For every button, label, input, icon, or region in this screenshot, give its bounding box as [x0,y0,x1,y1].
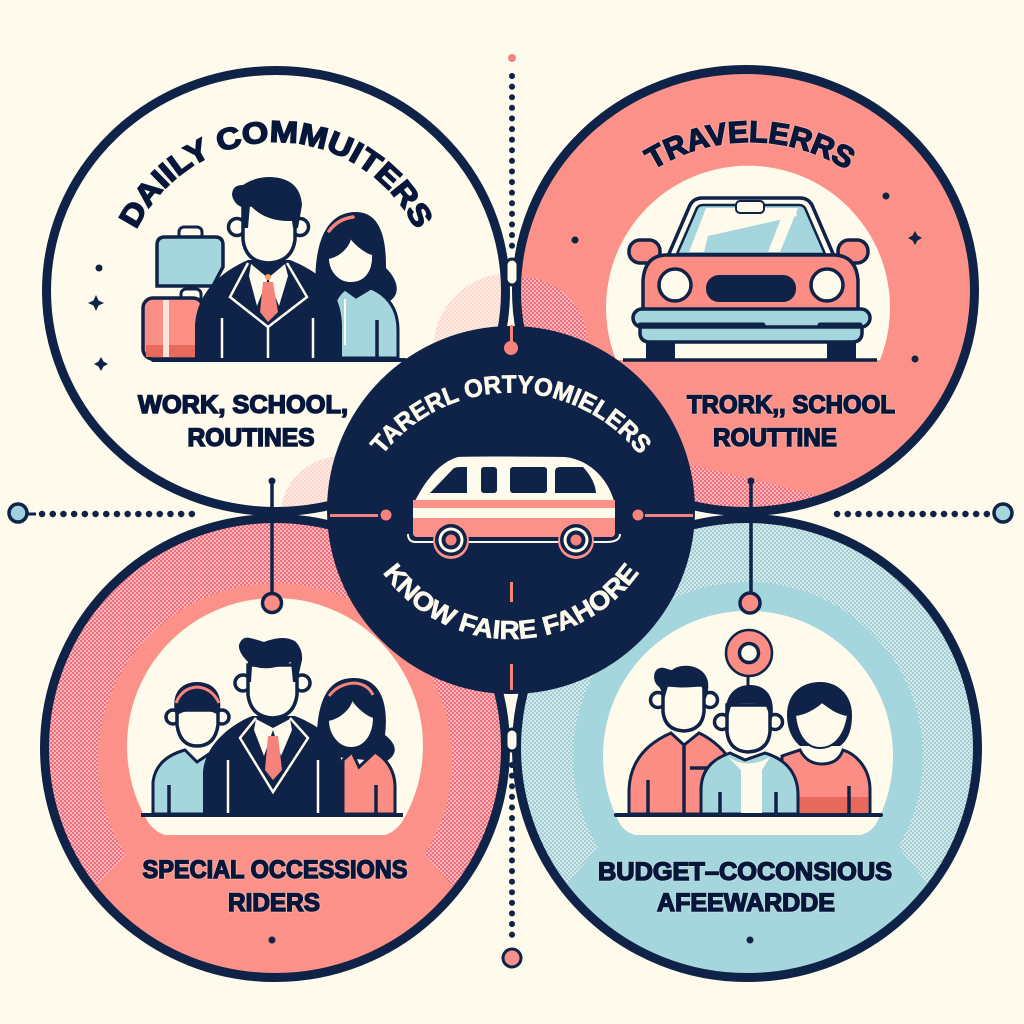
panel: budget-conscious [516,518,978,990]
text: work, school, routines: ROUTINES [188,424,314,452]
headlights [659,269,843,301]
icon: location pin [726,630,772,690]
windshield [668,198,834,256]
panel: special occasions riders [44,518,506,990]
text: work, school, routines [138,391,348,452]
connector: left horizontal dotted line [9,504,196,522]
car body [643,255,858,310]
text: budget-coconsious afeewardde: BUDGET–COCONSIOUS [598,858,892,886]
text: special occessions riders [142,856,408,917]
text: trork, school routtine [687,391,895,452]
figure: left man [629,666,727,814]
bus stripes [413,500,615,537]
text: special occessions riders: SPECIAL OCCESSIONS [142,856,408,884]
figure: woman [317,678,395,814]
mirrors [629,240,868,263]
text: trork, school routtine: TRORK,, SCHOOL [687,391,895,419]
bus underline [408,534,620,542]
grille [706,275,796,302]
dot [746,936,754,944]
bus wheels [433,523,594,559]
figure: right woman [782,682,870,814]
text: budget-coconsious afeewardde: AFEEWARDDE [657,889,835,917]
baseline [153,358,405,362]
baseline [141,813,403,817]
dot [268,936,276,944]
bumper [633,309,870,342]
decorative marks [572,192,922,362]
bus body [413,456,615,537]
connector pill: top [506,259,518,285]
text: budget-coconsious afeewardde [598,858,892,917]
connector: right horizontal dotted line [837,504,1012,522]
text: trork, school routtine: ROUTTINE [713,424,837,452]
icon: red suitcase [143,289,203,359]
panel: daily commuters [42,66,510,515]
heading: travelers: TRAVELERRS [641,120,856,168]
connector: right drop line [740,478,760,613]
baseline [616,813,881,817]
connector: left drop line [262,478,282,612]
figure: man in suit [203,638,343,814]
icon: minibus [408,456,620,559]
figure: boy [153,682,229,814]
figure: man in suit [195,177,342,358]
connector: top vertical dotted line [508,54,516,250]
connector: bottom vertical dotted line [503,765,521,967]
decorative marks [88,264,108,371]
central hub [327,325,695,694]
connector pill: bottom [506,729,518,751]
hub caption arc: KNOW FAIRE FAHORE [383,562,640,640]
icon: car [629,198,870,360]
icon: blue briefcase [157,227,223,286]
baseline [623,358,877,362]
hub heading arc: TARERL ORTYOMIELERS [368,375,650,453]
text: work, school, routines: WORK, SCHOOL, [138,391,348,419]
heading: daily commuters: DAIILY COMMUITERS [118,120,432,229]
figure: woman [315,212,398,358]
text: special occessions riders: RIDERS [228,889,320,917]
hub tick marks [330,325,693,690]
figure: middle child [701,685,798,814]
bus windows [430,467,596,493]
panel: travelers [512,65,979,515]
wheels [646,342,856,360]
